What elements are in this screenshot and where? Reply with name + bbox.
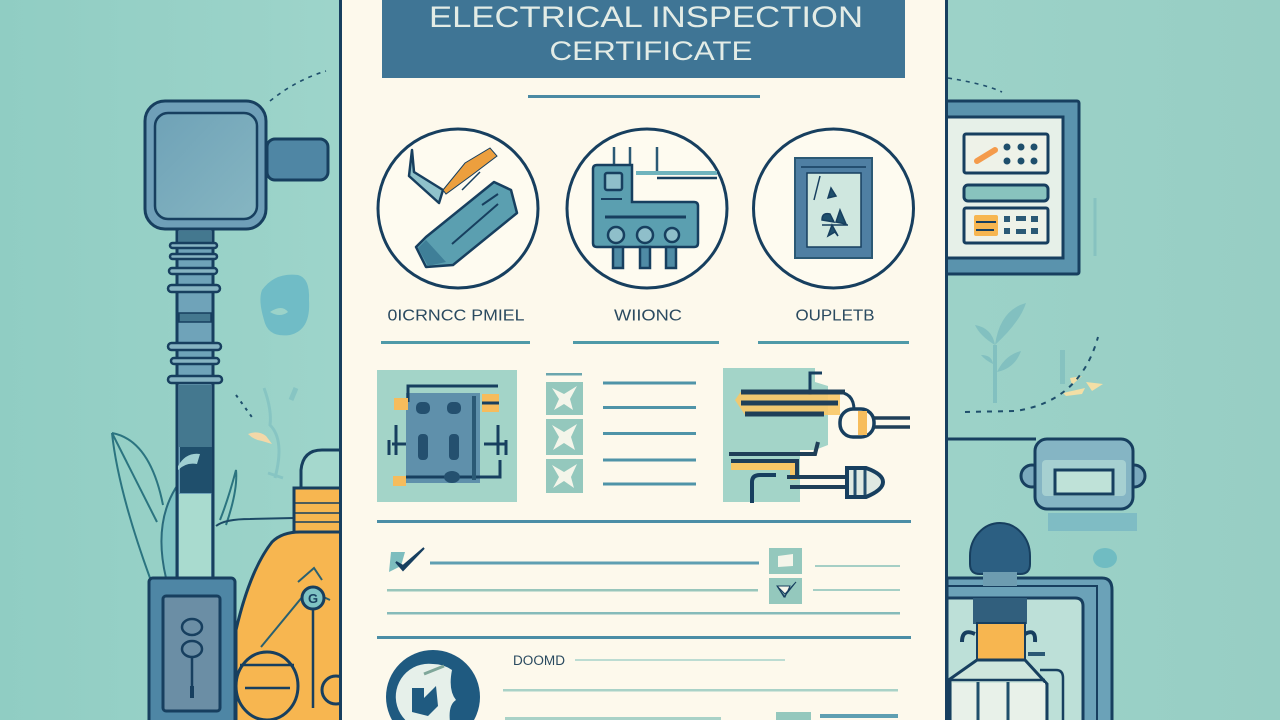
label: outlets: OUPLETB	[796, 308, 874, 324]
base box	[149, 578, 235, 720]
label: wiring: WIIONC	[614, 308, 682, 324]
paper	[340, 0, 946, 720]
approval check icon	[389, 548, 424, 572]
seal	[386, 650, 480, 720]
approval checkboxes	[769, 548, 802, 604]
lamp dome	[970, 523, 1030, 574]
faint gauge	[1094, 198, 1096, 256]
sign-off label: DOOMD	[513, 653, 565, 668]
leaf outlines	[112, 433, 236, 578]
orange jug	[236, 450, 350, 720]
left equipment illustration	[112, 71, 350, 720]
certificate sheet	[340, 0, 946, 720]
title banner	[382, 0, 905, 78]
icon circle: outlet	[754, 129, 914, 288]
icon circle: wiring breaker	[567, 129, 727, 288]
dashed arc upper right	[948, 78, 1002, 92]
wiring diagram	[723, 368, 910, 503]
checklist boxes	[546, 373, 583, 493]
device shaft	[177, 229, 213, 578]
wall connector device	[947, 439, 1145, 531]
title underline	[528, 95, 760, 98]
right equipment illustration	[940, 78, 1145, 720]
sign-off lines	[503, 659, 898, 720]
label underlines	[381, 341, 909, 344]
orange jug: G	[308, 591, 318, 606]
faint plant	[975, 303, 1026, 403]
faint sprig	[264, 388, 296, 478]
frame and lamp	[947, 523, 1112, 720]
section divider two	[377, 636, 911, 639]
panel row one	[964, 134, 1048, 173]
large leaf	[161, 470, 190, 578]
panel row two	[964, 185, 1048, 201]
section divider one	[377, 520, 911, 523]
lamp body	[973, 598, 1027, 624]
title line one: ELECTRICAL INSPECTION	[429, 1, 863, 34]
inspection device head	[145, 101, 328, 229]
panel row three	[964, 208, 1048, 243]
plug two	[847, 468, 883, 497]
title line two: CERTIFICATE	[550, 36, 752, 66]
thin cable	[216, 518, 294, 526]
dashed curve with spark	[965, 337, 1103, 412]
checklist lines	[603, 382, 696, 486]
plug one	[840, 409, 910, 437]
shaft rings	[168, 243, 222, 383]
blue blob	[260, 275, 309, 335]
glass vessel	[950, 660, 1047, 720]
panel diagram	[377, 370, 517, 502]
icon circle: service panel tool	[378, 129, 538, 288]
control panel	[940, 101, 1079, 274]
orange lamp band	[977, 623, 1025, 660]
sign-off checkbox	[776, 712, 811, 720]
label: panel: 0ICRNCC PMIEL	[388, 308, 525, 324]
approval lines	[387, 562, 900, 614]
teal blob	[1093, 548, 1117, 568]
lamp neck	[983, 572, 1017, 586]
dotted trail and yellow spark	[236, 395, 272, 444]
dashed arc upper left	[270, 71, 326, 101]
